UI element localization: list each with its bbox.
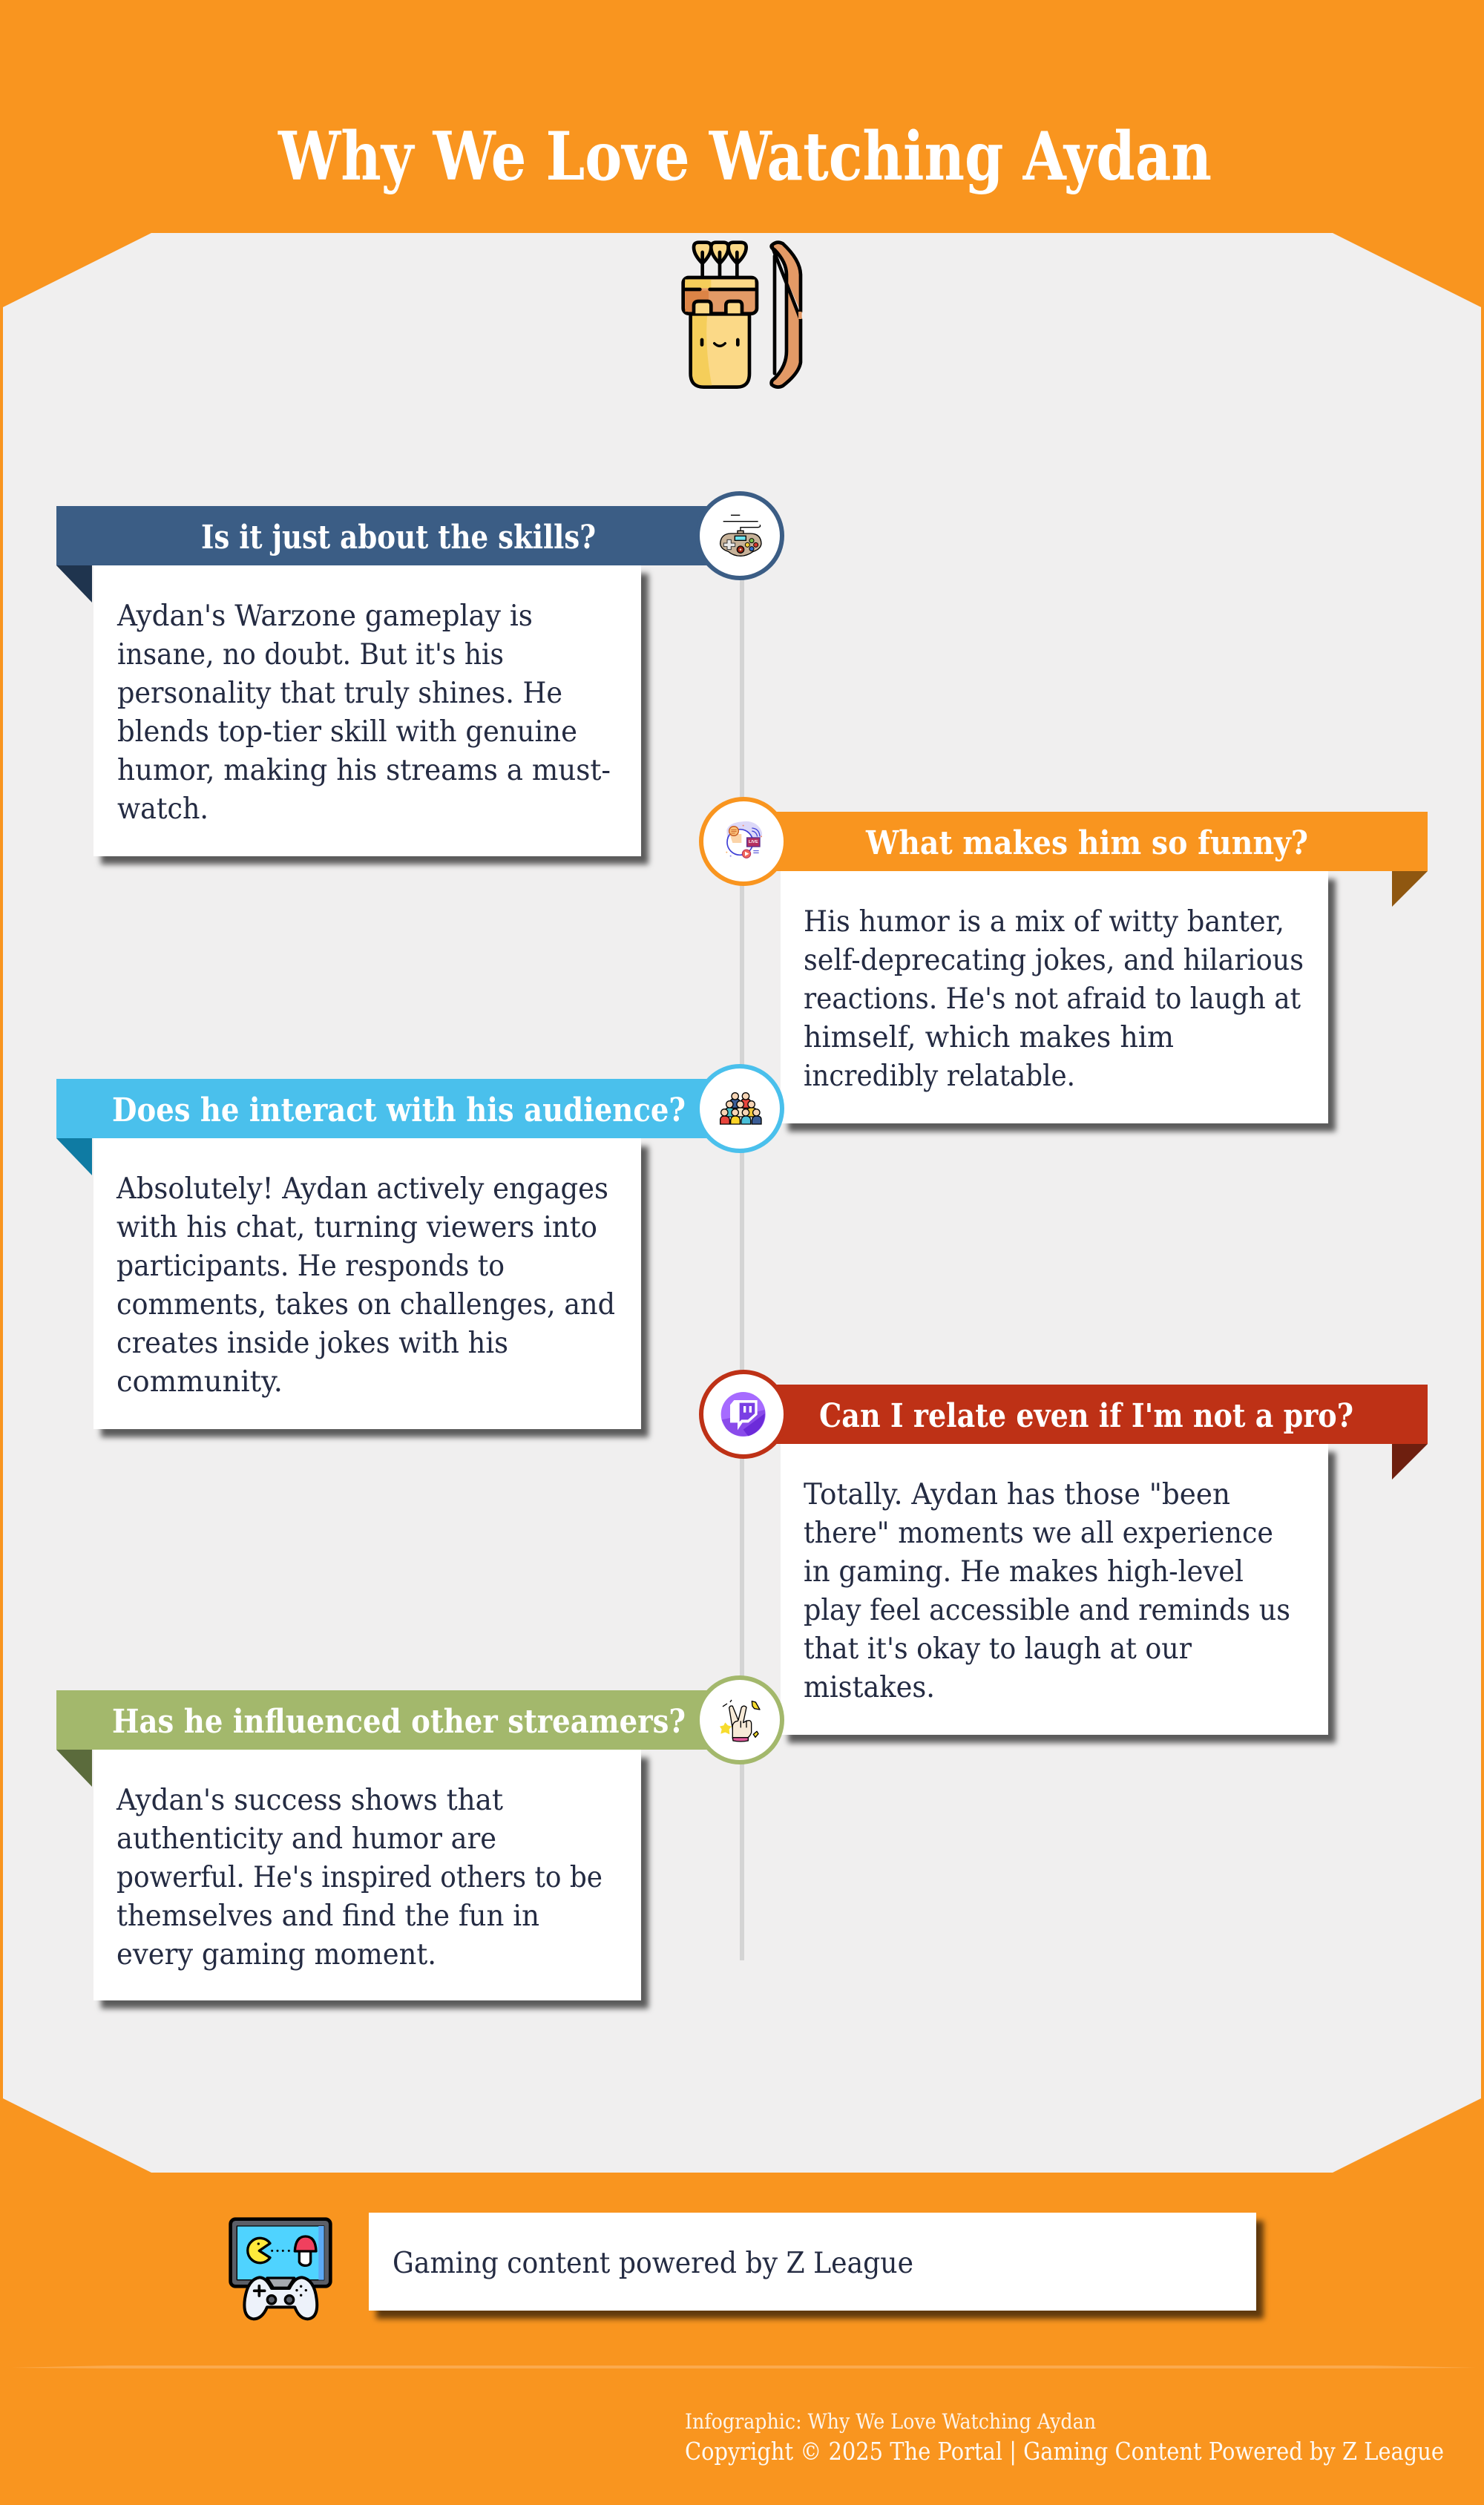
text: answer 3: comments, takes on challenges, and: [116, 1288, 615, 1322]
icon: quiver and bow: [683, 243, 802, 387]
text: answer 1: blends top-tier skill with genuine: [117, 715, 577, 749]
banner: question 2: [743, 812, 1428, 871]
panel: question 1: [56, 493, 782, 856]
footer credits: Infographic: Why We Love Watching Aydan: [685, 2409, 1096, 2434]
text: answer 5: [116, 1784, 603, 1972]
footer note box: Gaming content powered by Z League: [393, 2247, 913, 2280]
banner: question 1: [56, 506, 741, 565]
text: answer 4: [804, 1478, 1290, 1704]
banner: question 5: [56, 1690, 741, 1750]
text: answer 4: mistakes.: [804, 1671, 935, 1704]
heading: question 2: What makes him so funny?: [865, 824, 1308, 862]
card: answer 5: [93, 1750, 641, 2000]
text: answer 3: [116, 1172, 615, 1399]
text: answer 5: Aydan's success shows that: [116, 1784, 503, 1817]
panel: question 4: [701, 1372, 1428, 1735]
text: answer 3: Absolutely! Aydan actively engages: [116, 1172, 608, 1206]
icon: game console with pacman: [231, 2219, 330, 2319]
card: answer 4: [781, 1444, 1328, 1735]
icon: peace hand badge: [697, 1678, 782, 1762]
banner: question 4: [743, 1385, 1428, 1444]
text: answer 1: insane, no doubt. But it's his: [117, 638, 504, 672]
text: answer 2: reactions. He's not afraid to laugh at: [804, 982, 1301, 1016]
text: answer 1: watch.: [117, 792, 209, 826]
icon: live stream badge: LIVE: [749, 840, 758, 844]
text: answer 2: [804, 905, 1304, 1093]
text: answer 4: there" moments we all experience: [804, 1517, 1273, 1550]
banner: question 3: [56, 1079, 741, 1138]
panel: question 2: [701, 799, 1428, 1123]
text: answer 1: personality that truly shines. He: [117, 677, 562, 710]
ribbon fold: [56, 1750, 92, 1787]
text: answer 5: authenticity and humor are: [116, 1822, 496, 1856]
text: answer 3: creates inside jokes with his: [116, 1327, 508, 1360]
text: answer 1: Aydan's Warzone gameplay is: [116, 600, 533, 633]
text: answer 2: self-deprecating jokes, and hilarious: [804, 944, 1304, 977]
text: answer 3: with his chat, turning viewers into: [116, 1211, 597, 1244]
heading: question 3: Does he interact with his audience?: [112, 1091, 686, 1129]
footer note box: [369, 2213, 1256, 2311]
ribbon fold: [56, 565, 92, 603]
ribbon fold: [56, 1138, 92, 1175]
text: answer 1: [116, 600, 611, 826]
text: answer 2: himself, which makes him: [804, 1021, 1174, 1054]
card: answer 1: [93, 565, 641, 856]
text: answer 4: play feel accessible and reminds us: [804, 1594, 1290, 1627]
icon: twitch badge: [701, 1372, 786, 1457]
text: answer 4: that it's okay to laugh at our: [804, 1632, 1192, 1666]
text: answer 2: His humor is a mix of witty banter,: [804, 905, 1284, 939]
text: answer 1: humor, making his streams a must-: [117, 754, 611, 787]
text: answer 4: Totally. Aydan has those "been: [804, 1478, 1230, 1511]
text: answer 5: themselves and find the fun in: [116, 1900, 539, 1933]
card: answer 2: [781, 871, 1328, 1123]
panel: question 3: [56, 1066, 782, 1429]
timeline line: [740, 536, 744, 1960]
panel: main content area: [3, 233, 1481, 2173]
text: answer 5: every gaming moment.: [116, 1938, 436, 1972]
text: answer 2: incredibly relatable.: [804, 1060, 1075, 1093]
heading: question 4: Can I relate even if I'm not a pro?: [819, 1397, 1353, 1435]
icon: audience badge: [697, 1066, 782, 1151]
footer divider: [11, 2366, 1477, 2368]
text: answer 3: community.: [116, 1365, 283, 1399]
footer credits: [685, 2409, 1444, 2466]
ribbon fold: [1392, 871, 1428, 907]
icon: game controller badge: [697, 493, 782, 578]
text: answer 4: in gaming. He makes high-level: [804, 1555, 1244, 1589]
text: answer 3: participants. He responds to: [116, 1250, 505, 1283]
card: answer 3: [93, 1138, 641, 1429]
text: answer 5: powerful. He's inspired others to be: [116, 1861, 603, 1894]
title: Why We Love Watching Aydan: [278, 117, 1212, 196]
panel: question 5: [56, 1678, 782, 2000]
ribbon fold: [1392, 1444, 1428, 1480]
icon: live stream badge: [701, 799, 786, 884]
heading: question 1: Is it just about the skills?: [201, 519, 596, 557]
heading: question 5: Has he influenced other streamers?: [112, 1703, 686, 1741]
